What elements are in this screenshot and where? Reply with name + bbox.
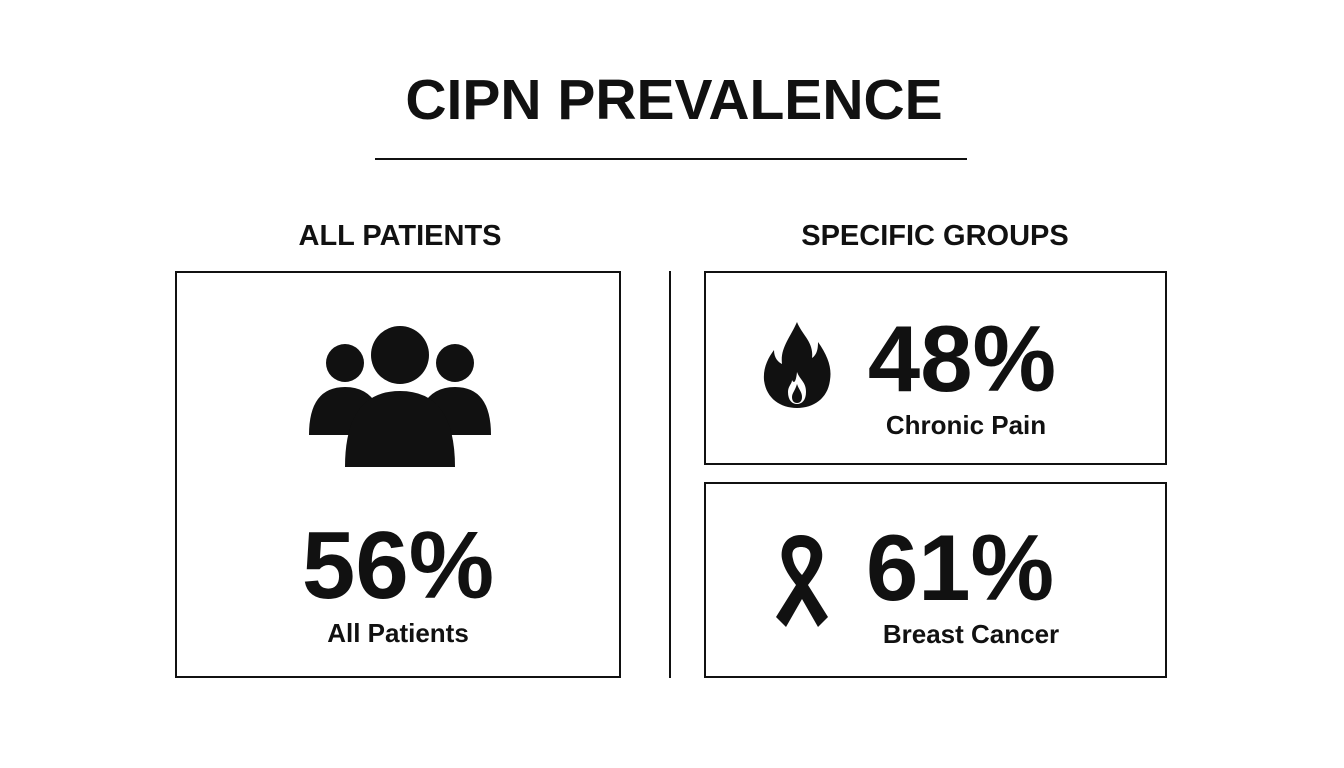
- panel: chronic pain: [704, 271, 1167, 465]
- panel: all patients: [175, 271, 621, 678]
- stat: 56%: 56%: [302, 512, 494, 619]
- icon: flame: [764, 322, 830, 408]
- label: breast cancer: Breast Cancer: [883, 619, 1059, 649]
- icon: ribbon: [776, 535, 828, 627]
- stat: 48%: 48%: [868, 306, 1056, 411]
- title: CIPN PREVALENCE: [405, 68, 943, 132]
- label: chronic pain: Chronic Pain: [886, 410, 1046, 440]
- stat: 61%: 61%: [866, 515, 1054, 620]
- icon: people: [309, 326, 491, 467]
- heading: all patients: ALL PATIENTS: [298, 220, 502, 252]
- panel: breast cancer: [704, 482, 1167, 678]
- label: all patients: All Patients: [327, 618, 469, 648]
- heading: specific groups: SPECIFIC GROUPS: [801, 220, 1069, 252]
